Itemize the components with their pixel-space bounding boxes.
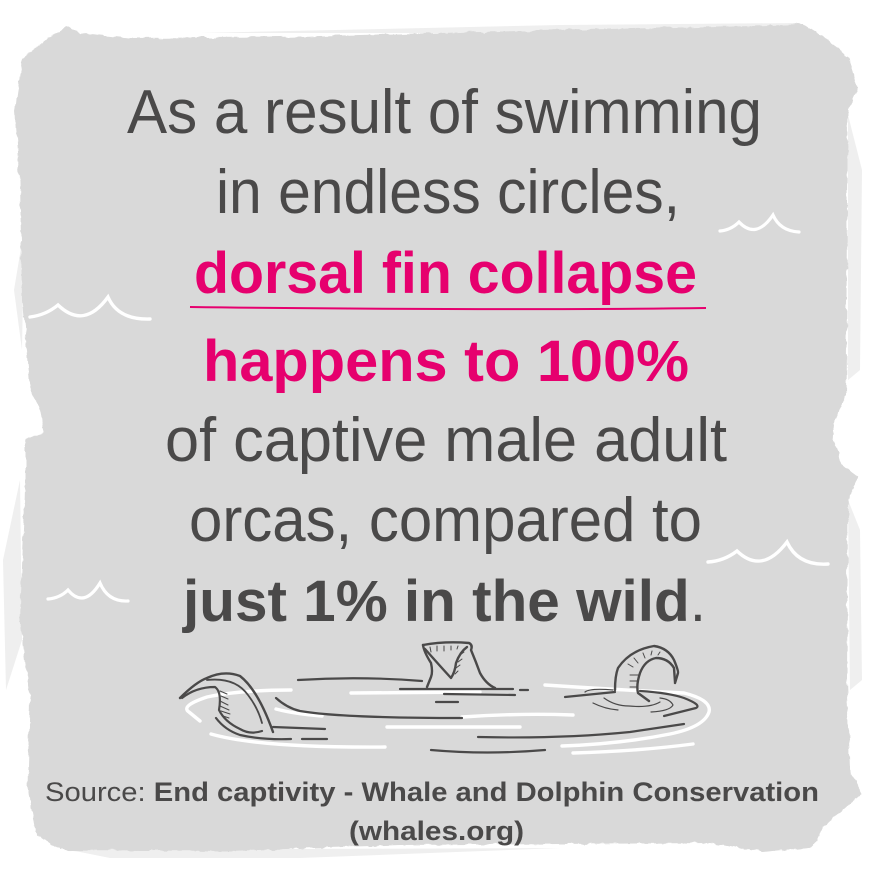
fin centre xyxy=(423,642,495,688)
icon: wave upper right xyxy=(720,215,799,232)
illustration: collapsed fins in water xyxy=(180,642,709,753)
heading: pink highlight xyxy=(194,241,697,394)
text: comparison: of captive male adult xyxy=(165,406,727,475)
text: comparison xyxy=(165,406,727,555)
water lines xyxy=(216,678,698,752)
source citation: (whales.org) xyxy=(349,816,524,846)
heading: pink highlight: dorsal fin collapse xyxy=(194,241,697,306)
text: wild statistic: just 1% in the wild. xyxy=(182,569,706,634)
fin right xyxy=(615,646,678,701)
ripples xyxy=(585,689,673,712)
icon: wave lower right xyxy=(708,542,828,564)
heading: intro text: in endless circles, xyxy=(216,158,680,227)
heading: intro text xyxy=(127,78,762,227)
fin left xyxy=(180,673,273,733)
underline below pink text xyxy=(190,307,706,309)
heading: pink highlight: happens to 100% xyxy=(203,329,689,394)
water highlights xyxy=(187,685,709,753)
heading: intro text: As a result of swimming xyxy=(127,78,762,147)
source citation xyxy=(45,777,819,846)
icon: wave left xyxy=(30,297,150,319)
source citation: Source: End captivity - Whale and Dolphin Conservation xyxy=(45,777,819,807)
icon: wave lower left xyxy=(48,583,128,601)
text: comparison: orcas, compared to xyxy=(189,486,702,555)
